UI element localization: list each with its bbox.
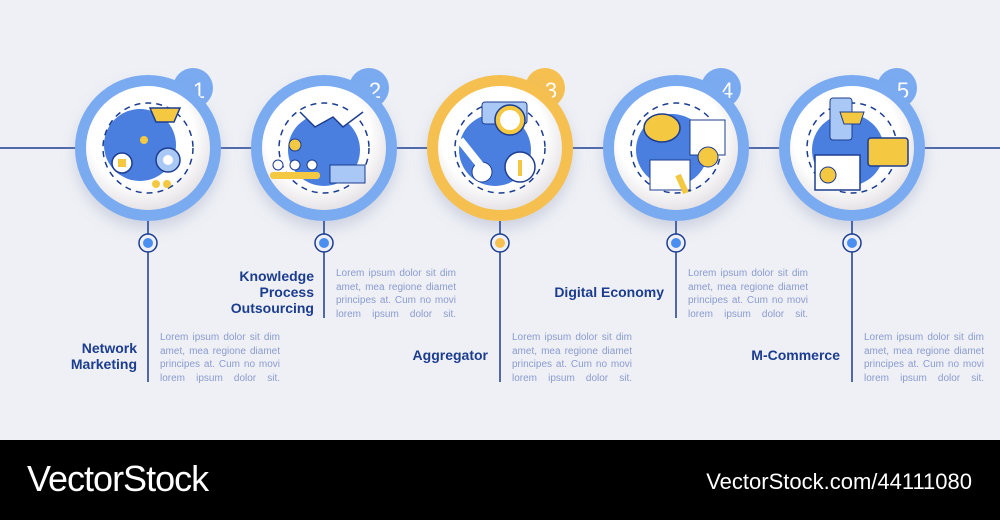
step 1: 1 [193,78,205,103]
text 2: Lorem ipsum dolor sit dim [336,268,456,279]
title 5: M-Commerce [751,347,840,363]
title 1 [71,340,137,372]
text 5 [864,332,984,384]
text 1: Lorem ipsum dolor sit dim [160,332,280,343]
title 4: Digital Economy [554,284,664,300]
step 3: 3 [545,78,557,103]
text 2: amet, mea regione diamet [336,282,456,292]
text 4 [688,268,808,320]
text 1: amet, mea regione diamet [160,346,280,356]
text 3: lorem ipsum dolor sit. [512,372,632,384]
footer logo: VectorStock [27,458,208,499]
text 3: amet, mea regione diamet [512,346,632,356]
step 4 [603,68,749,318]
step 3 [427,68,573,382]
text 3 [512,332,632,384]
step 2: 2 [369,78,381,103]
text 4: principes at. Cum no movi [688,295,808,306]
text 2: principes at. Cum no movi [336,295,456,306]
text 3: Lorem ipsum dolor sit dim [512,332,632,343]
step 5 [779,68,925,382]
text 5: amet, mea regione diamet [864,346,984,356]
title 3: Aggregator [413,347,488,363]
text 2 [336,268,456,320]
text 1: principes at. Cum no movi [160,359,280,370]
footer url: VectorStock.com/44111080 [706,469,972,494]
text 5: principes at. Cum no movi [864,359,984,370]
text 1 [160,332,280,384]
title 1: Marketing [71,356,137,372]
step 4: 4 [721,78,733,103]
text 4: amet, mea regione diamet [688,282,808,292]
text 5: lorem ipsum dolor sit. [864,372,984,384]
text 1: lorem ipsum dolor sit. [160,372,280,384]
footer [0,440,1000,520]
text 3: principes at. Cum no movi [512,359,632,370]
text 5: Lorem ipsum dolor sit dim [864,332,984,343]
title 2: Process [260,284,314,300]
step 2 [251,68,397,318]
title 1: Network [82,340,137,356]
title 2: Knowledge [239,268,314,284]
step 1 [75,68,221,382]
step 5: 5 [897,78,909,103]
text 4: Lorem ipsum dolor sit dim [688,268,808,279]
title 2 [231,268,314,316]
text 2: lorem ipsum dolor sit. [336,308,456,320]
title 2: Outsourcing [231,300,314,316]
text 4: lorem ipsum dolor sit. [688,308,808,320]
